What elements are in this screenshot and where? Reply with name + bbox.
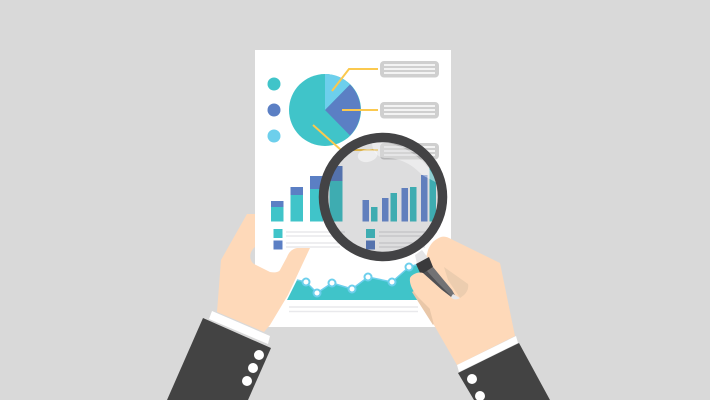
callout label 2 [380, 102, 439, 118]
panel: report page [255, 50, 451, 327]
magnifier neck [415, 250, 428, 264]
right cuff [457, 336, 518, 372]
lens ring [324, 138, 442, 256]
under finger shadow [412, 285, 445, 325]
magnifying glass lens [324, 138, 442, 256]
lens highlight [358, 149, 377, 162]
legend left [274, 229, 345, 250]
footer text lines [289, 307, 418, 312]
magnifier handle [416, 257, 456, 297]
left sleeve [167, 318, 271, 400]
callout label 1 [380, 61, 439, 78]
area chart [287, 262, 430, 300]
left hand [167, 214, 310, 400]
bar chart: stacked [271, 166, 342, 222]
lens crescent glare [372, 142, 438, 184]
legend right [366, 229, 430, 250]
pie chart [289, 74, 361, 146]
front finger [410, 272, 452, 316]
left sleeve buttons [242, 350, 264, 386]
bar chart: paired [362, 166, 436, 222]
palm shadow [444, 267, 468, 298]
callout lines [313, 69, 378, 150]
right sleeve [458, 343, 550, 400]
left cuff [209, 311, 270, 344]
callout label 3 [380, 143, 439, 160]
palm and back of hand [425, 237, 515, 365]
right hand [410, 237, 550, 400]
magnifier tip glint [451, 294, 460, 299]
legend dots [268, 78, 280, 142]
right sleeve buttons [467, 374, 485, 400]
